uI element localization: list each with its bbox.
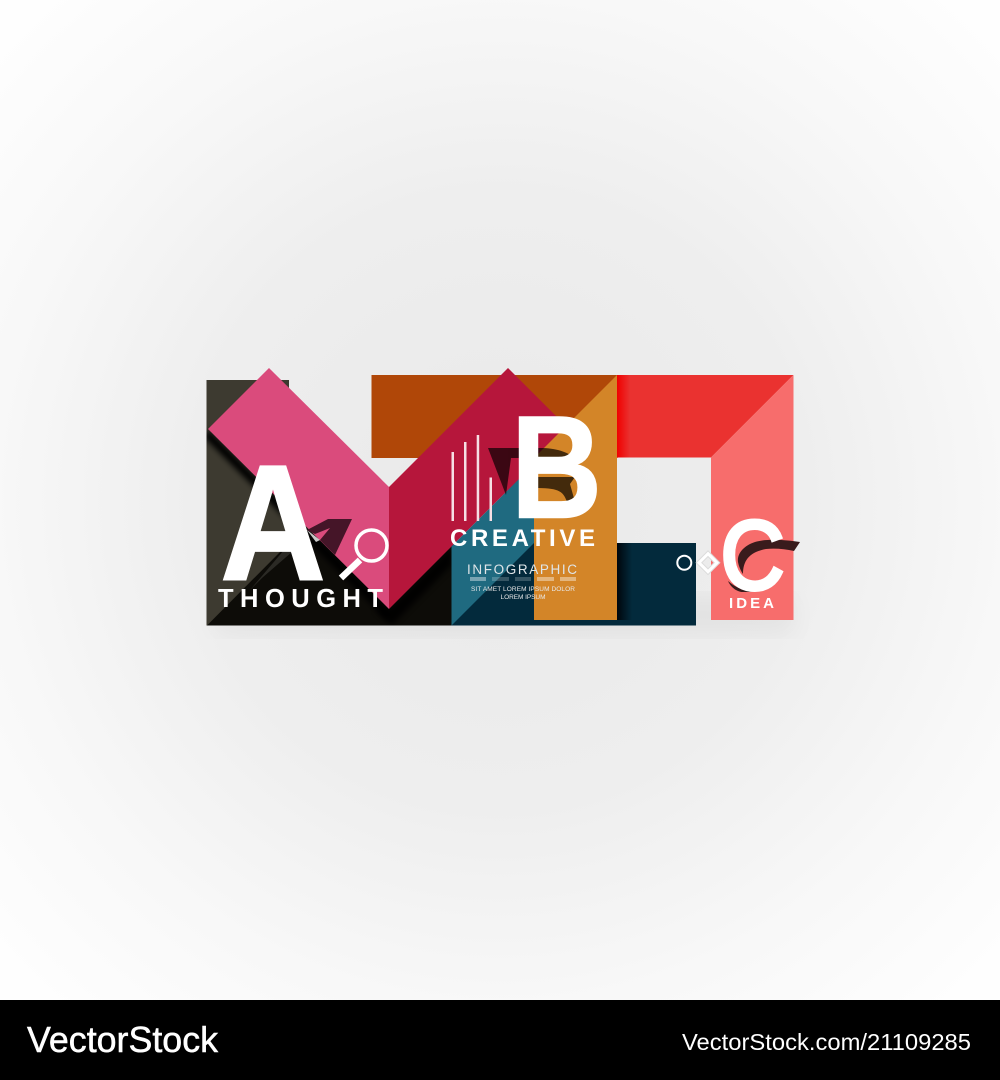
small caption: SIT AMET LOREM IPSUM DOLOR — [471, 586, 575, 593]
panel: crimson chevron — [389, 368, 570, 609]
label: INFOGRAPHIC: INFOGRAPHIC — [467, 562, 577, 577]
panel: coral column — [711, 375, 794, 620]
footer image id: VectorStock.com/21109285 — [682, 1029, 971, 1055]
big letter A: A — [221, 431, 325, 614]
panel: A dark block — [205, 380, 452, 626]
small caption — [471, 586, 575, 601]
navy shadow beside orange — [617, 543, 635, 620]
small bars — [470, 577, 576, 581]
icon: diamond — [699, 554, 717, 572]
label: THOUGHT: THOUGHT — [218, 585, 383, 613]
icon: vertical bar lines — [452, 435, 492, 521]
label: CREATIVE: CREATIVE — [450, 525, 595, 552]
footer bar — [0, 1000, 1000, 1080]
icon: circle — [677, 556, 691, 570]
panel: pink chevron — [208, 368, 389, 609]
footer brand: VectorStock — [27, 1019, 219, 1060]
label: IDEA: IDEA — [729, 595, 774, 612]
big letter C: C — [720, 500, 784, 610]
small caption: LOREM IPSUM — [500, 594, 546, 601]
big letter B: B — [511, 386, 602, 548]
icon: dark paper plane — [307, 519, 352, 555]
panel: teal triangle — [452, 464, 534, 626]
icon: dark swoosh behind B — [488, 448, 575, 502]
icon: dark swoosh behind C — [728, 540, 800, 592]
panel: navy base — [452, 543, 696, 626]
panel: orange column — [534, 375, 617, 620]
soft ground shadow — [215, 595, 795, 635]
icon: magnifier — [341, 530, 387, 578]
panel: red top band — [617, 375, 794, 458]
panel: brown top band — [372, 375, 618, 458]
